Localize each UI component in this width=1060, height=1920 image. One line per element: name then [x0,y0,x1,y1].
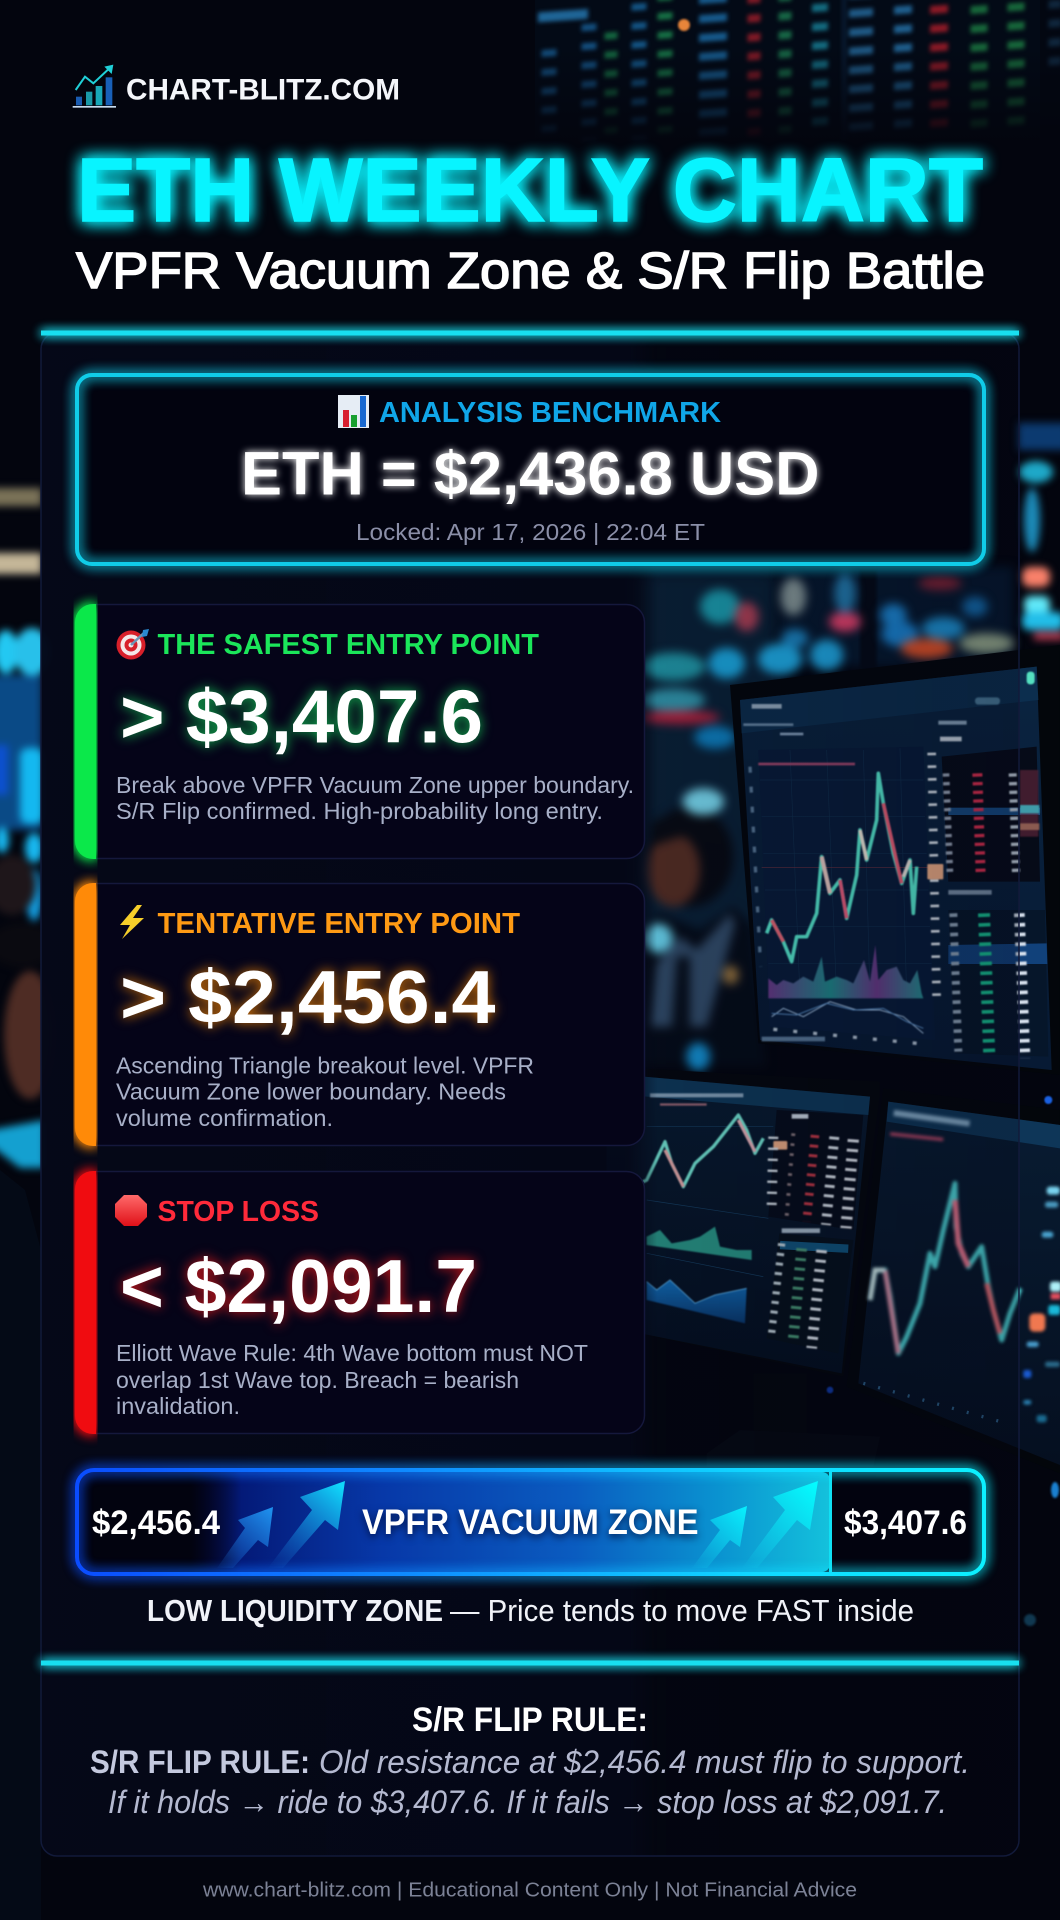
icon: bar chart with arrow [73,65,116,108]
description: invalidation. [116,1393,240,1419]
background: blurred trader [633,788,767,1071]
S/R flip rule: If it holds → ride to $3,407.6. If it fails → stop loss at $2,091.7. [108,1784,947,1820]
description: Vacuum Zone lower boundary. Needs [116,1078,506,1104]
benchmark label: ANALYSIS BENCHMARK [379,397,721,429]
description [116,1052,534,1131]
description [116,772,634,824]
icon: target [116,629,149,660]
panel: safest entry card [75,604,644,859]
S/R flip rule: S/R FLIP RULE: [90,1744,310,1780]
footer: www.chart-blitz.com | Educational Content Only | Not Financial Advice [202,1880,857,1902]
background: dark shoulder at lower left [0,1170,41,1920]
background: ticker board [520,0,1060,170]
liquidity note: — Price tends to move FAST inside [450,1593,914,1628]
icon: lightning [120,905,144,939]
title: ETH WEEKLY CHART [77,141,983,241]
benchmark price: ETH = $2,436.8 USD [241,440,820,508]
background: lower-left monitor [607,1067,880,1467]
price: > $3,407.6 [120,674,483,758]
top divider [41,330,1019,336]
arrows: right pair [692,1481,818,1568]
description: Elliott Wave Rule: 4th Wave bottom must NOT [116,1340,588,1366]
heading: STOP LOSS [158,1196,319,1228]
panel: stop loss card [75,1171,644,1434]
panel: tentative entry card [75,883,644,1146]
zone label: VPFR VACUUM ZONE [362,1503,698,1542]
background: left wall lights [0,488,56,1168]
lower divider [41,1660,1019,1666]
icon: bar chart emoji [338,395,369,428]
logo [73,65,400,108]
panel: VPFR vacuum zone bar [77,1470,984,1574]
description: Ascending Triangle breakout level. VPFR [116,1052,534,1078]
liquidity note: LOW LIQUIDITY ZONE [147,1593,443,1628]
logo: CHART-BLITZ.COM [126,74,400,106]
price: < $2,091.7 [120,1244,477,1328]
icon: stop sign [115,1195,147,1226]
background: main trading monitor [730,645,1060,1075]
price: > $2,456.4 [120,955,496,1039]
liquidity note [147,1593,914,1628]
upper price: $3,407.6 [844,1504,967,1542]
S/R flip rule: S/R FLIP RULE: [412,1701,648,1739]
panel: analysis benchmark [77,375,984,564]
lower price: $2,456.4 [92,1504,220,1542]
panel: main content [41,330,1019,1856]
background: lights at lower right edge [1024,1482,1059,1626]
background: right wall lights [1018,423,1060,640]
description: overlap 1st Wave top. Breach = bearish [116,1367,519,1393]
description: volume confirmation. [116,1105,333,1131]
locked timestamp: Locked: Apr 17, 2026 | 22:04 ET [356,519,705,545]
description [116,1340,588,1419]
heading: TENTATIVE ENTRY POINT [158,908,520,940]
S/R flip rule [90,1701,970,1820]
S/R flip rule: Old resistance at $2,456.4 must flip to support. [319,1744,970,1780]
description: Break above VPFR Vacuum Zone upper boundary. [116,772,634,798]
subtitle: VPFR Vacuum Zone & S/R Flip Battle [76,242,985,299]
arrows: left pair [217,1481,345,1568]
heading: THE SAFEST ENTRY POINT [158,629,539,661]
background: blurred floor lights and monitor wall [640,567,1014,1000]
description: S/R Flip confirmed. High-probability long entry. [116,798,603,824]
background: lower-right monitor [847,1088,1060,1473]
